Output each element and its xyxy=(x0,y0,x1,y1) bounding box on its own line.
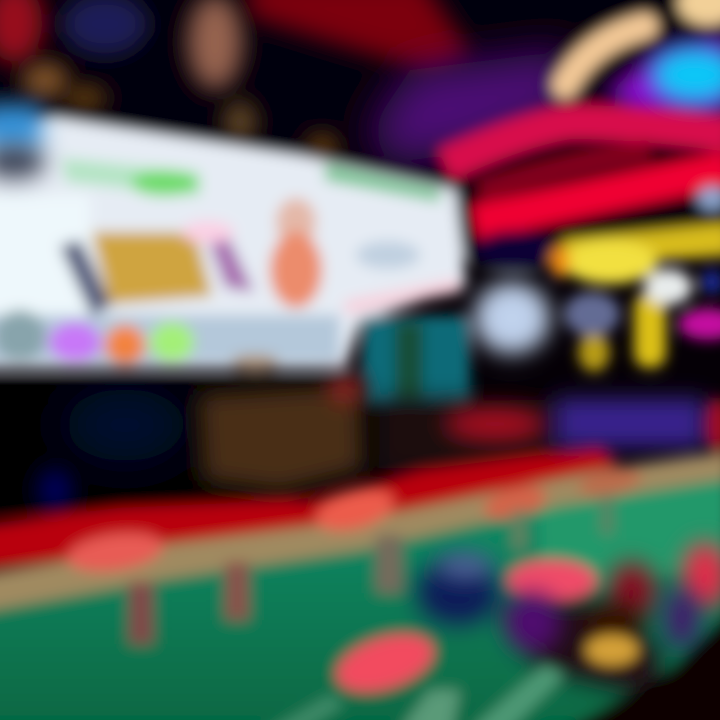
large white screen xyxy=(0,106,466,370)
right text placeholder xyxy=(356,241,420,269)
dark corner panel xyxy=(0,144,46,180)
rail red highlights xyxy=(65,464,644,577)
white light box xyxy=(474,282,550,354)
yellow sign xyxy=(550,186,720,372)
rail posts xyxy=(129,495,614,644)
green heading bars xyxy=(62,158,200,196)
back panels xyxy=(380,397,720,468)
table light stripes xyxy=(260,665,565,720)
blue corner panel xyxy=(0,106,42,148)
table rail xyxy=(0,452,720,612)
green table xyxy=(0,452,720,720)
pink and purple bar xyxy=(205,232,254,292)
grey slanted bar xyxy=(60,240,112,316)
red neon bands xyxy=(445,122,720,222)
red chip on table xyxy=(330,624,440,702)
top right lights xyxy=(565,0,720,112)
dark gap under neon xyxy=(473,230,557,270)
pink lower edge xyxy=(345,285,460,308)
poker chip stacks xyxy=(416,543,720,700)
teal box xyxy=(362,316,470,404)
dark counter band xyxy=(0,374,370,515)
right table panels xyxy=(540,482,720,590)
grey lower band xyxy=(0,315,340,363)
yellow panel xyxy=(92,232,212,304)
presenter figure xyxy=(276,198,316,246)
colour chips strip xyxy=(0,310,279,370)
ceiling background xyxy=(0,0,720,260)
dark floor corner xyxy=(550,610,720,720)
red carpet xyxy=(0,448,620,570)
